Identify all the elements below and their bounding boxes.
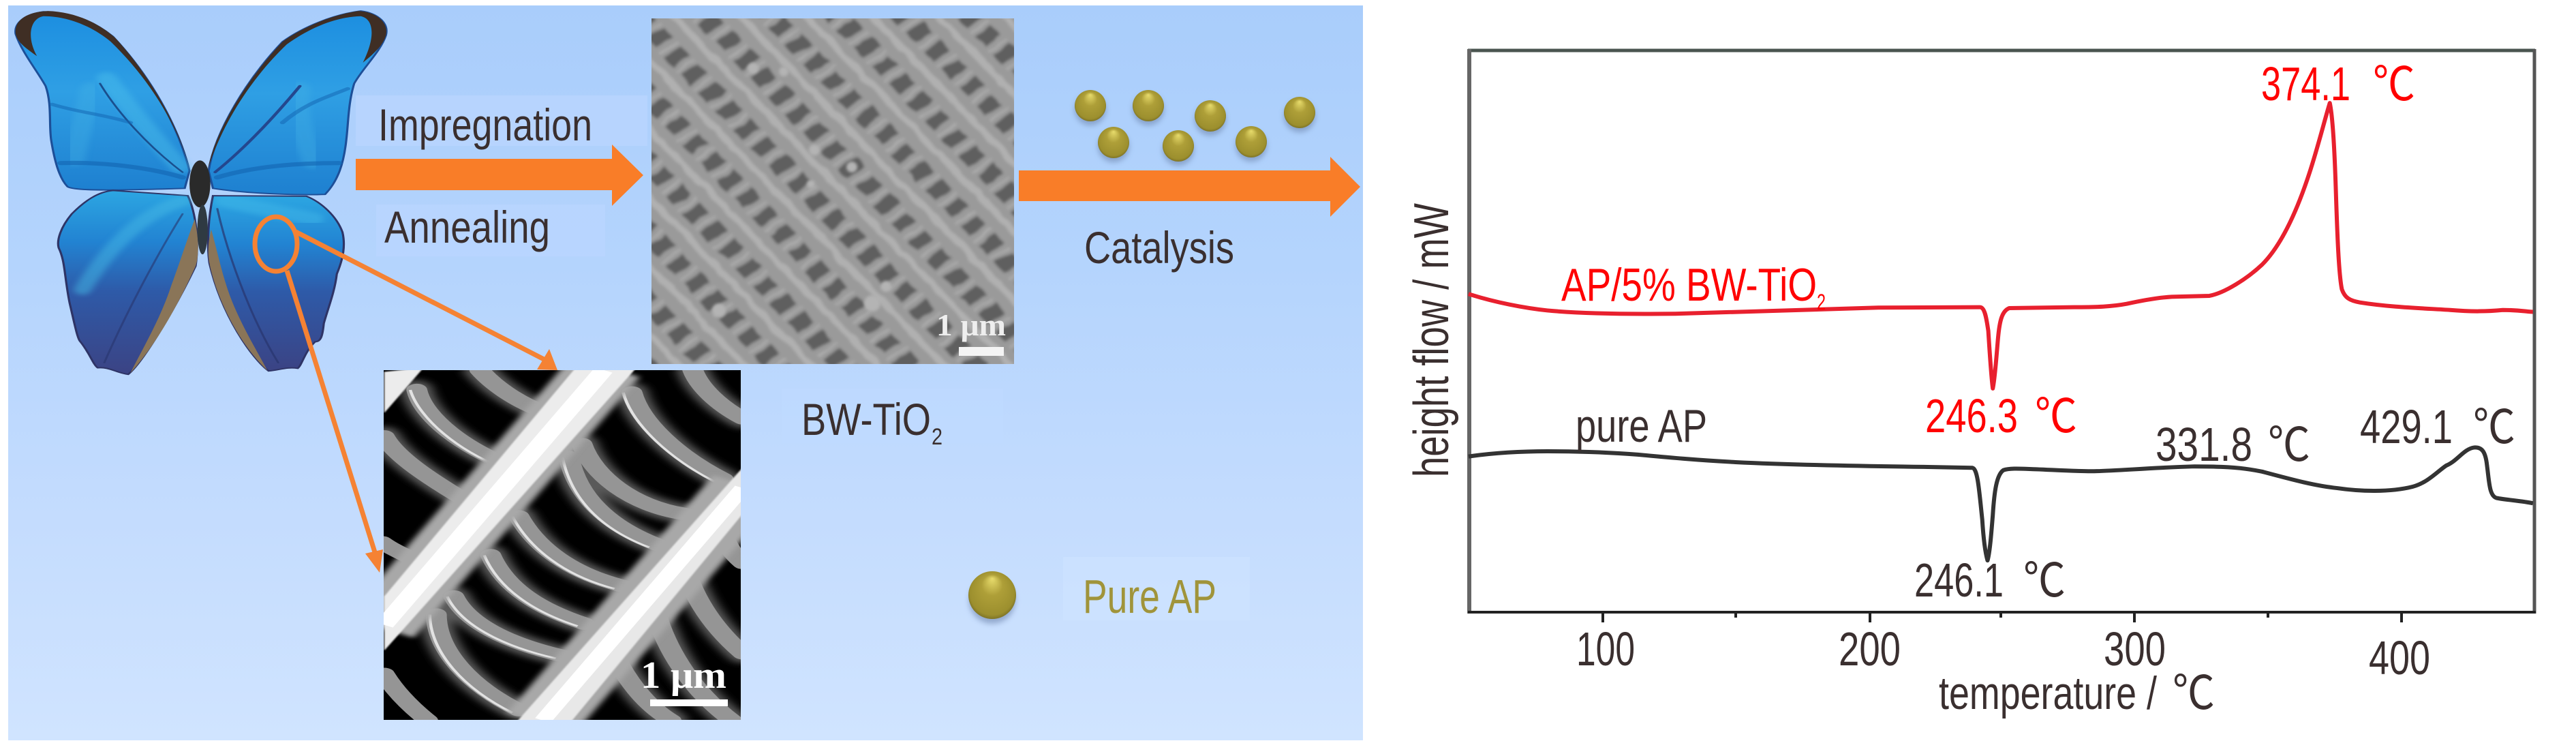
wing detail ring [255,217,297,271]
ridge flanks [380,367,747,723]
black ground [384,370,741,720]
label: 246.3 C: ℃ [2035,391,2077,442]
wing leading edges and tips [16,11,190,170]
scale bar [959,347,1004,356]
label: 246.1 C: 246.1 [1914,554,2004,607]
cross ribs [382,370,743,721]
arrow to SEM image left [287,271,375,552]
chart: DSC curves [1405,49,2536,719]
series label: AP/5% BW-TiO2: 2 [1817,290,1826,314]
longitudinal ridges [384,368,743,722]
panel background [8,5,1363,740]
x tick labels: 200 [1839,622,1901,676]
wing highlights and veins [52,78,348,363]
peak labels [1914,57,2515,607]
scale label: 1 μm [641,654,726,697]
arrow to SEM image top [296,232,545,360]
label: 246.3 C: 246.3 [1925,389,2018,442]
text: Impregnation: Impregnation [378,100,592,150]
text: Annealing: Annealing [384,202,550,252]
scale bar [650,699,728,706]
label halo patches [356,95,1250,620]
legend particle [968,571,1016,624]
icon: morpho butterfly [16,11,386,374]
curve: pure AP [1469,447,2533,560]
curve: AP/5% BW-TiO2 [1469,103,2533,389]
arrow: impregnation / annealing [356,145,643,206]
x axis title: ℃ [2173,667,2215,719]
plot frame [1468,49,2536,614]
legend label: Pure AP [1083,570,1216,623]
label: 331.8 C: 331.8 [2156,418,2252,471]
x tick labels: 100 [1576,622,1635,676]
series label: AP/5% BW-TiO2: AP/5% BW-TiO [1561,259,1817,311]
x tick labels: 400 [2369,631,2430,684]
label: 374.1 C: ℃ [2373,59,2415,110]
AP particles [1075,90,1315,166]
soft membrane webbing [384,370,743,721]
label: 246.1 C: ℃ [2023,555,2066,607]
label: 331.8 C: ℃ [2268,419,2310,471]
x tick labels: 300 [2104,622,2166,676]
brown wing margins [130,219,198,373]
lower right wing [208,196,344,371]
butterfly body [189,160,211,207]
SEM texture [651,18,1014,364]
rib highlights [410,390,714,712]
arrow: catalysis [1019,157,1360,217]
SEM image: butterfly wing [380,367,747,723]
label: 429.1 C: 429.1 [2360,400,2453,453]
scale label: 1 μm [936,307,1006,342]
x axis title: temperature / [1939,667,2157,719]
x axis ticks [1603,612,2402,622]
text: BW-TiO2: BW-TiO [801,394,931,444]
series label: pure AP: pure AP [1576,400,1707,452]
legend: pure AP [968,570,1216,624]
particle debris [712,63,891,317]
text: Catalysis: Catalysis [1084,222,1234,273]
callout: orange ellipse and arrows [255,217,557,573]
lower left wing [58,190,197,374]
label: 429.1 C: ℃ [2473,402,2515,453]
text: BW-TiO2: 2 [932,424,942,450]
SEM image: BW-TiO2 [651,18,1014,364]
x tick labels [1576,622,2430,684]
upper left wing [16,12,189,190]
y axis title: height flow / mW [1405,203,1459,477]
upper right wing [209,11,386,194]
label: 374.1 C: 374.1 [2261,57,2350,110]
panel: synthesis schematic [8,0,1363,740]
